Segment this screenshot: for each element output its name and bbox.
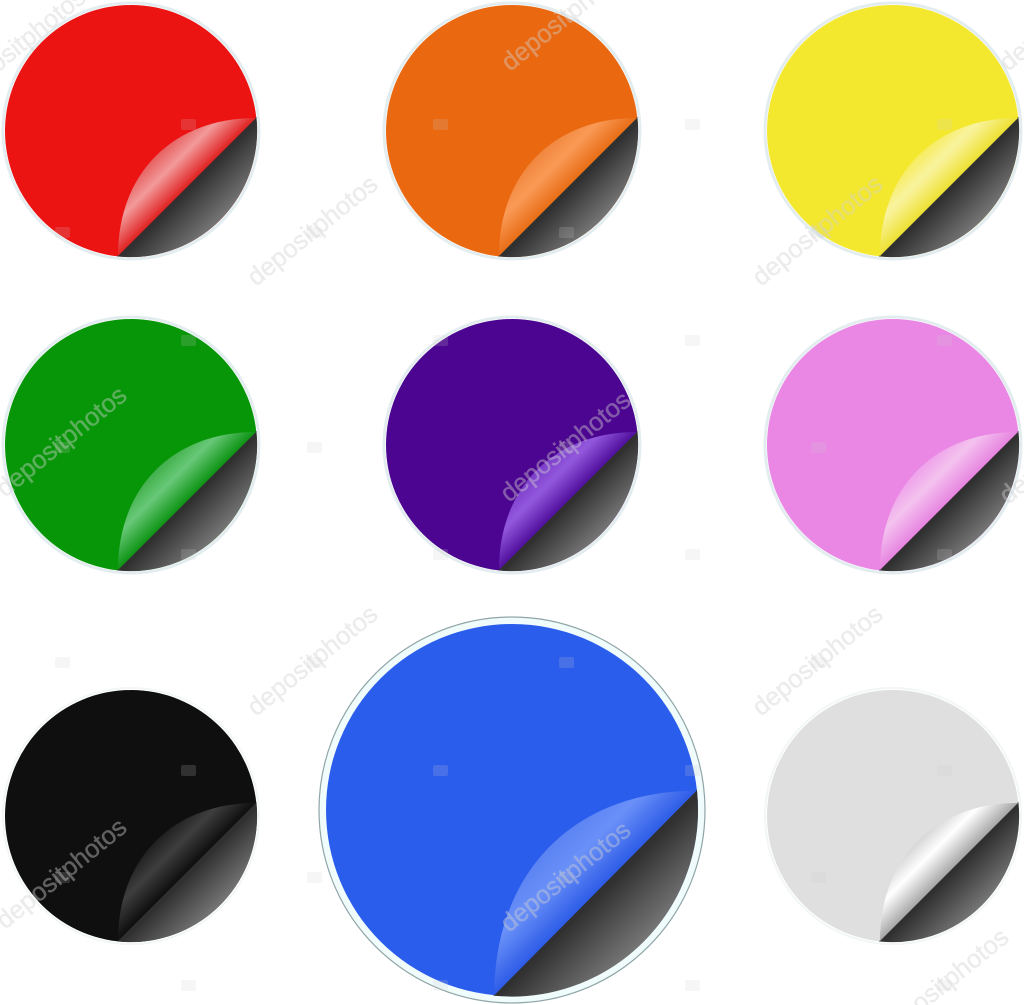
sticker: green xyxy=(3,317,259,573)
watermark text: depositphotos xyxy=(242,600,383,722)
sticker: large blue xyxy=(319,617,705,1003)
sticker: yellow xyxy=(765,3,1021,259)
watermark camera icons xyxy=(55,119,952,991)
watermark text: depositphotos xyxy=(495,816,636,938)
watermark text: depositphotos xyxy=(747,170,888,292)
sticker: orange xyxy=(384,3,640,259)
sticker: black xyxy=(3,688,259,944)
sticker: light gray xyxy=(765,688,1021,944)
sticker: red xyxy=(3,3,259,259)
watermark text: depositphotos xyxy=(747,600,888,722)
sticker: pink xyxy=(765,317,1021,573)
watermark text: depositphotos xyxy=(495,386,636,508)
sticker: purple xyxy=(384,317,640,573)
watermark text: depositphotos xyxy=(242,170,383,292)
